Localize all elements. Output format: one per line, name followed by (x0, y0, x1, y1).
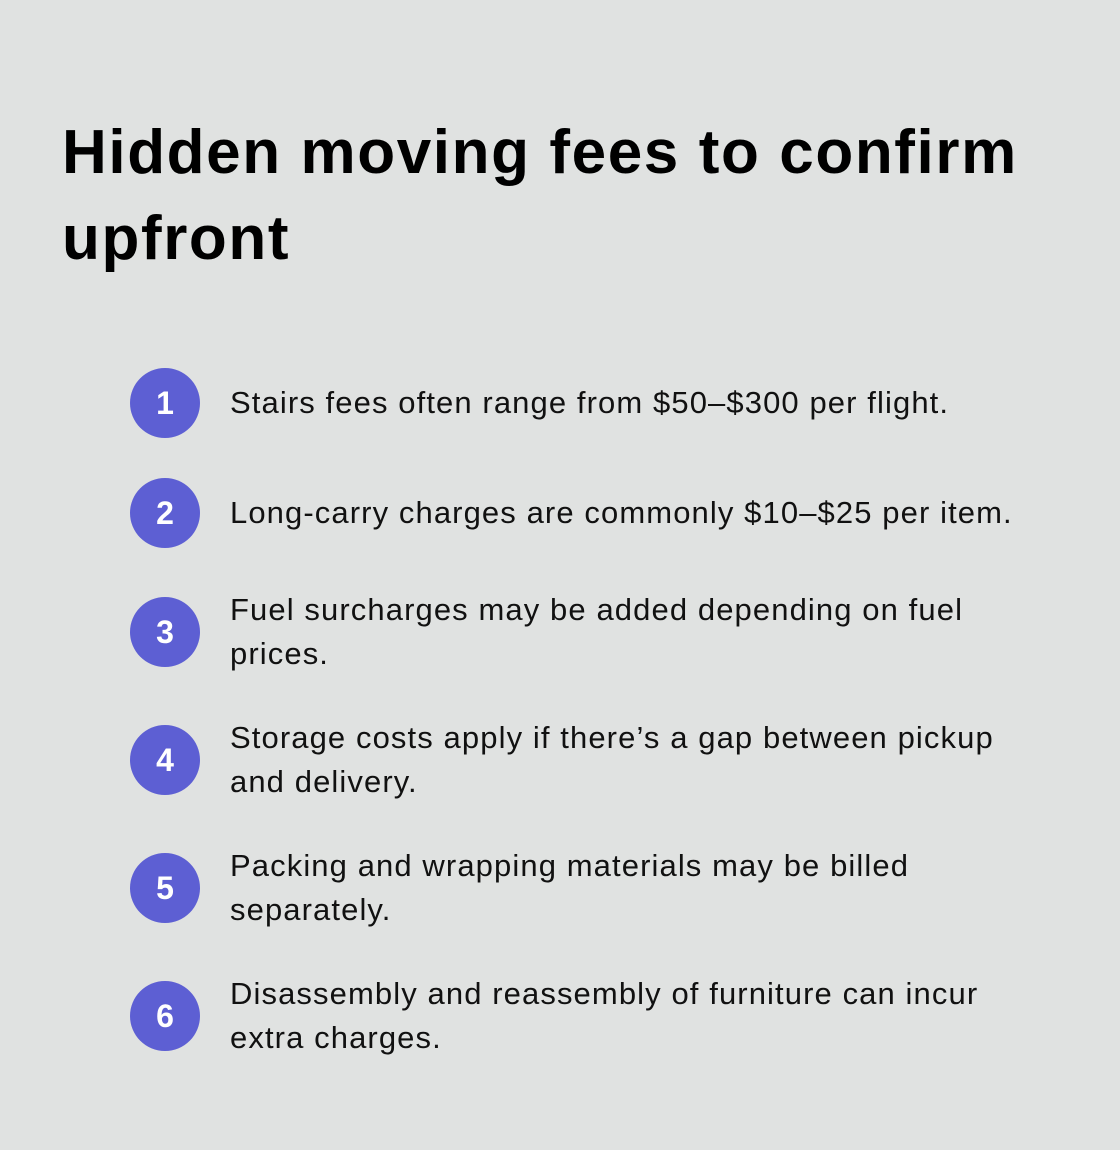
item 2: 2 (156, 495, 174, 531)
item 4: 4 (156, 742, 174, 778)
item 3: Fuel surcharges may be added depending on fuel (230, 592, 963, 627)
item 2: Long-carry charges are commonly $10–$25 per item. (230, 495, 1013, 530)
item 4: and delivery. (230, 764, 418, 799)
item 3: 3 (156, 614, 174, 650)
item 1 (130, 368, 949, 438)
item 1: Stairs fees often range from $50–$300 per flight. (230, 385, 949, 420)
item 6: Disassembly and reassembly of furniture can incur (230, 976, 978, 1011)
item 1: 1 (156, 385, 174, 421)
title: Hidden moving fees to confirm (62, 118, 1018, 187)
title: upfront (62, 204, 290, 273)
item 5: Packing and wrapping materials may be billed (230, 848, 909, 883)
title (62, 118, 1018, 273)
item 4 (130, 720, 994, 799)
item 5: separately. (230, 892, 391, 927)
item 6: extra charges. (230, 1020, 442, 1055)
item 2 (130, 478, 1013, 548)
item 6: 6 (156, 998, 174, 1034)
item 6 (130, 976, 978, 1055)
item 4: Storage costs apply if there’s a gap between pickup (230, 720, 994, 755)
item 3 (130, 592, 963, 671)
item 3: prices. (230, 636, 329, 671)
item 5: 5 (156, 870, 174, 906)
item 5 (130, 848, 909, 927)
